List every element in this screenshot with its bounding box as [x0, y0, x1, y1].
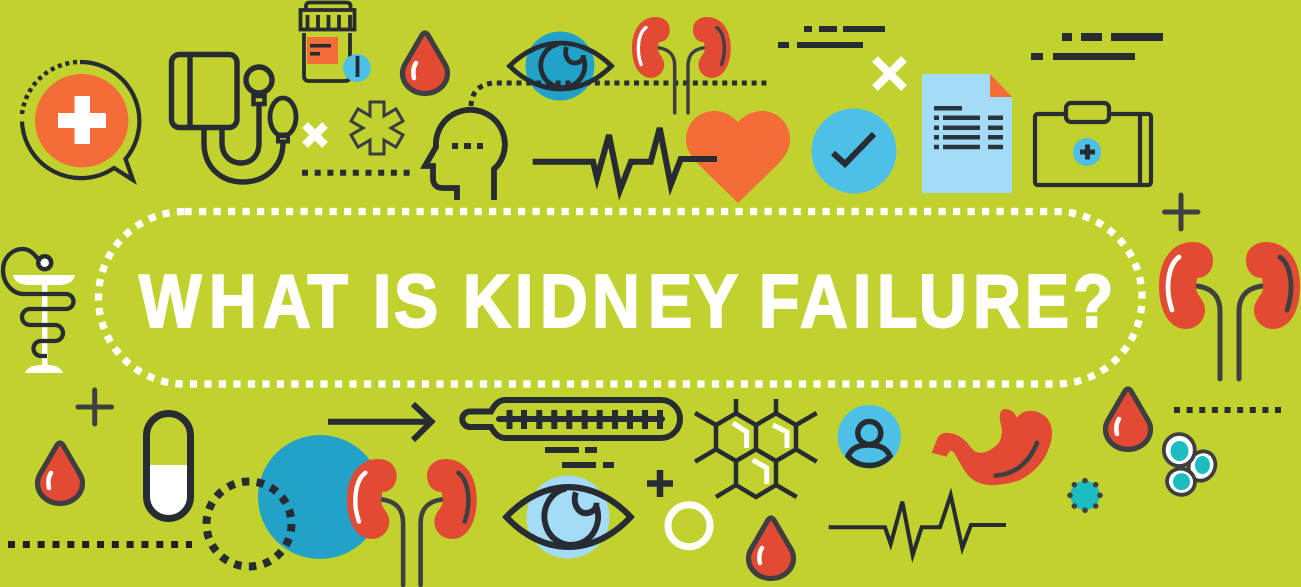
- icon: capsule pill: [146, 414, 190, 518]
- icon: document: [922, 74, 1012, 193]
- icon: kidneys right: [1159, 242, 1300, 379]
- title: IS: [373, 260, 438, 344]
- icon: blood drop bottom centre: [748, 518, 794, 578]
- icon: check circle: [812, 108, 896, 194]
- arrow: [328, 404, 432, 440]
- dotted line: under star: [302, 170, 410, 176]
- icon: medical star: [351, 102, 403, 154]
- icon: large white x: [875, 59, 904, 88]
- icon: white ring: [668, 505, 710, 547]
- icon: blood pressure cuff: [172, 54, 296, 182]
- dotted line: bottom right: [1174, 407, 1281, 413]
- icon: plus top right: [1164, 195, 1198, 229]
- icon: plus dark: [647, 470, 673, 497]
- title: FAILURE?: [759, 260, 1113, 344]
- icon: thermometer: [462, 400, 680, 438]
- icon: molecule: [695, 399, 817, 497]
- icon: eye on light blue circle: [506, 476, 631, 558]
- icon: speech bubble with medical cross: [22, 62, 139, 180]
- icon: teal cell with dots: [1067, 478, 1103, 513]
- pulse line bottom: [829, 495, 1006, 555]
- title: WHAT: [139, 260, 348, 344]
- icon: kidneys bottom: [347, 459, 477, 585]
- dotted line: head to kidneys: [471, 83, 767, 106]
- icon: small white x: [305, 125, 325, 145]
- icon: caduceus: [3, 249, 75, 373]
- icon: plus left: [78, 390, 112, 424]
- icon: first aid kit: [1035, 103, 1151, 185]
- title: KIDNEY: [463, 260, 738, 344]
- icon: dashed circle: [206, 482, 292, 566]
- dashes: top centre: [778, 26, 885, 48]
- icon: cell cluster: [1164, 434, 1220, 498]
- icon: blood drop bottom left: [38, 443, 82, 504]
- icon: blood drop right: [1106, 389, 1150, 450]
- pulse line top: [533, 128, 717, 190]
- icon: head profile: [425, 110, 505, 200]
- icon: blood drop: [402, 33, 448, 94]
- dashes: below thermometer: [545, 447, 614, 468]
- dotted line: bottom left: [8, 541, 192, 548]
- title capsule dotted outline: [98, 212, 1142, 384]
- icon: user circle: [838, 405, 901, 468]
- icon: eye on blue circle: [510, 32, 612, 100]
- icon: pill bottle: [300, 2, 371, 82]
- dashes: top right: [1031, 33, 1163, 60]
- icon: heart: [686, 111, 790, 203]
- icon: stomach: [932, 409, 1052, 485]
- icon: kidneys top: [632, 17, 731, 113]
- icon: big blue circle: [258, 435, 382, 559]
